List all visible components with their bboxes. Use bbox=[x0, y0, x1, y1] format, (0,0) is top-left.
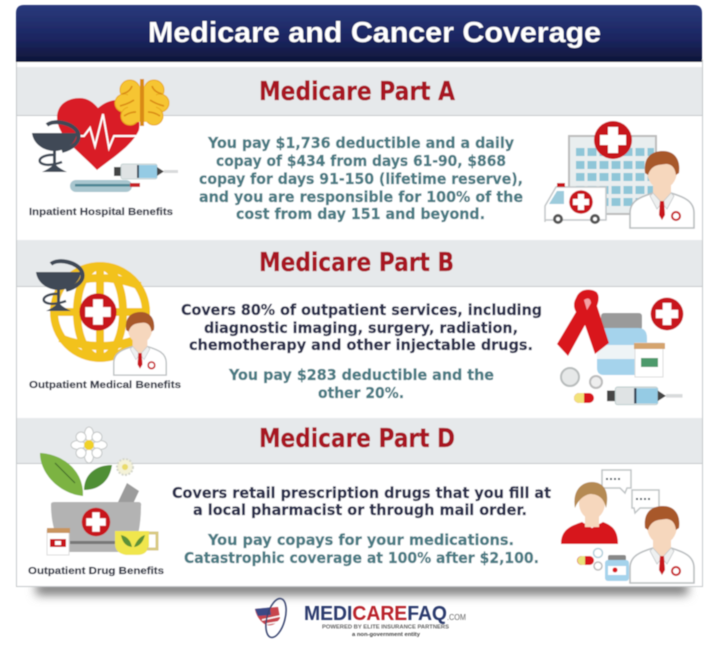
wordmark: MEDICAREFAQ bbox=[304, 603, 447, 625]
icon: flag globe bbox=[255, 596, 290, 640]
icon: globe, bowl, doctor bbox=[36, 261, 166, 375]
tagline: POWERED BY ELITE INSURANCE PARTNERS bbox=[322, 624, 450, 630]
text: Part B coverage: other 20%. bbox=[318, 384, 404, 402]
text: Part B coverage bbox=[181, 301, 542, 402]
text: Part A costs: copay of $434 from days 61-90, $868 bbox=[216, 152, 506, 170]
icon: ribbon, bottle, pills, syringe bbox=[557, 290, 683, 405]
icon: hospital, ambulance, doctor bbox=[545, 121, 694, 228]
caption: outpatient drug: Outpatient Drug Benefits bbox=[28, 565, 164, 577]
text: Part B coverage: You pay $283 deductible and the bbox=[228, 366, 494, 384]
panel: Part A bbox=[17, 67, 702, 228]
icon: herbs, mortar, cup bbox=[40, 427, 157, 555]
heading: Part A: Medicare Part A bbox=[259, 77, 455, 107]
panel: Part D bbox=[17, 418, 702, 583]
text: Part D coverage: Catastrophic coverage at 100% after $2,100. bbox=[184, 549, 539, 567]
text: Part A costs: and you are responsible for 100% of the bbox=[199, 188, 523, 206]
text: Part D coverage bbox=[172, 484, 552, 567]
logo: MedicareFAQ bbox=[255, 596, 466, 640]
text: Part D coverage: You pay copays for your medications. bbox=[207, 531, 514, 549]
text: Part D coverage: Covers retail prescription drugs that you fill at bbox=[172, 484, 552, 502]
card drop shadow bbox=[36, 582, 688, 595]
text: Part D coverage: a local pharmacist or through mail order. bbox=[193, 501, 527, 519]
text: Part A costs bbox=[199, 134, 523, 223]
caption: outpatient medical: Outpatient Medical Benefits bbox=[29, 379, 181, 391]
title banner bbox=[16, 5, 702, 62]
title: Medicare and Cancer Coverage bbox=[148, 17, 601, 49]
text: Part A costs: copay for days 91-150 (lifetime reserve), bbox=[199, 170, 523, 188]
text: Part B coverage: Covers 80% of outpatient services, including bbox=[181, 301, 542, 319]
main card bbox=[16, 60, 702, 586]
icon: heart, brain, bowl, syringe bbox=[32, 79, 178, 192]
icon: patient, speech bubbles, doctor, pills bbox=[561, 470, 694, 583]
disclaimer: a non-government entity bbox=[352, 632, 420, 638]
heading: Part B: Medicare Part B bbox=[259, 248, 454, 278]
text: Part B coverage: diagnostic imaging, surgery, radiation, bbox=[204, 319, 518, 337]
heading: Part D: Medicare Part D bbox=[259, 424, 455, 454]
caption: inpatient: Inpatient Hospital Benefits bbox=[29, 206, 173, 218]
text: Part A costs: You pay $1,736 deductible and a daily bbox=[207, 134, 514, 152]
text: Part A costs: cost from day 151 and beyond. bbox=[236, 205, 485, 223]
panel: Part B bbox=[17, 240, 702, 405]
.com: .COM bbox=[447, 613, 466, 622]
text: Part B coverage: chemotherapy and other injectable drugs. bbox=[189, 336, 533, 354]
